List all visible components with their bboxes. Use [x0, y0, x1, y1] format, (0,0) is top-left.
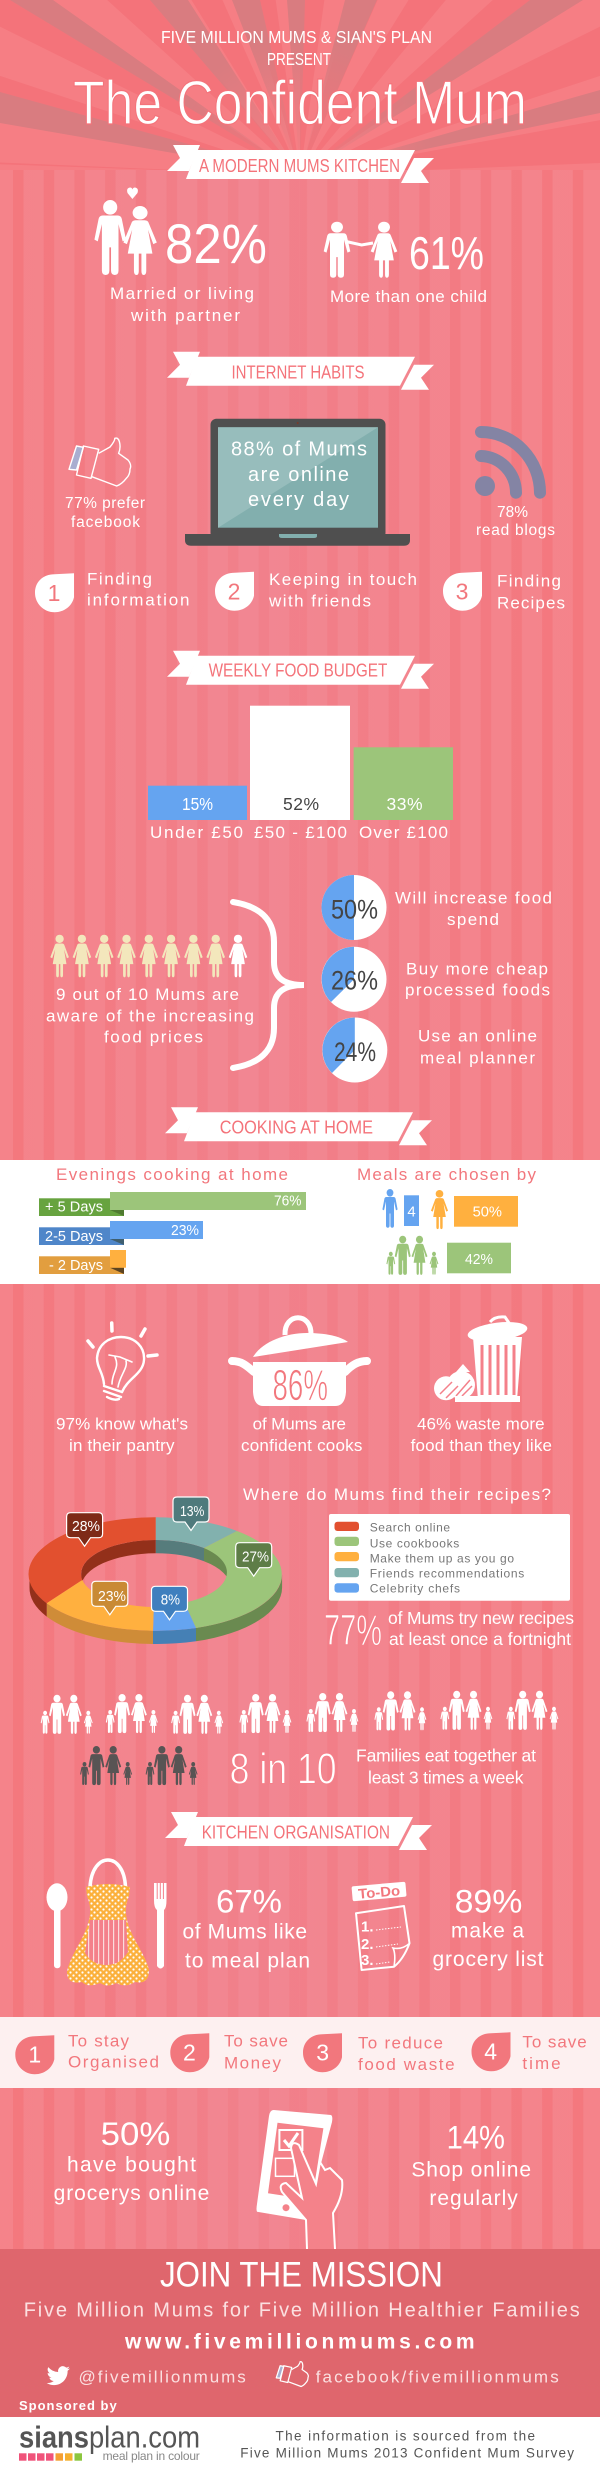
- source note: Five Million Mums 2013 Confident Mum Survey: [240, 2445, 574, 2460]
- pictogram: 9 out of 10 mums: aware of the increasing: [46, 1007, 254, 1026]
- stat: 14% shop online: 14%: [447, 2119, 505, 2155]
- logo: siansplan.com: siansplan.com: [19, 2420, 200, 2455]
- donut chart: recipe sources: [29, 1497, 282, 1644]
- icon: to-do list: 3.: [361, 1952, 374, 1969]
- panel: join the mission footer: [0, 2249, 600, 2417]
- pie: 26% cheap processed foods: Buy more cheap: [406, 959, 548, 978]
- panel: cooking at home: [0, 1160, 600, 1284]
- legend: recipe sources: Celebrity chefs: [370, 1581, 460, 1595]
- pictogram: 8 in 10 families: [41, 1691, 558, 1793]
- chart: evenings cooking at home: - 2 Days: [49, 1258, 103, 1274]
- logo: siansplan.com: meal plan in colour: [103, 2449, 200, 2463]
- panel: reasons for planning: Money: [224, 2053, 282, 2072]
- ranked list: internet uses: 2: [228, 578, 240, 604]
- stat: facebook thumb: facebook: [71, 514, 140, 531]
- ranked list: internet uses: 3: [456, 578, 468, 604]
- panel: reasons for planning: [0, 2017, 600, 2088]
- section banner: internet habits: INTERNET HABITS: [232, 362, 364, 382]
- icon: to-do list: To-Do: [357, 1882, 401, 1902]
- legend: recipe sources: Friends recommendations: [370, 1566, 524, 1580]
- stat: 77% try new recipes: [324, 1606, 574, 1655]
- ranked list: internet uses: Recipes: [497, 593, 565, 612]
- section banner: cooking at home: [165, 1107, 432, 1145]
- pie: 26% cheap processed foods: 26%: [331, 965, 378, 995]
- chart: evenings cooking at home: 76%: [274, 1194, 302, 1210]
- donut sides: [29, 1540, 282, 1644]
- stat: blogs rss icon: 78%: [497, 504, 528, 521]
- stat: 89% grocery list: grocery list: [432, 1948, 544, 1971]
- chart: meals are chosen by: [357, 1165, 536, 1275]
- bar chart: weekly food budget: 52%: [283, 794, 319, 814]
- stat: married or living with partner: with partner: [130, 306, 240, 325]
- stat: more than one child: More than one child: [330, 287, 487, 306]
- panel: sponsor and source: [0, 2417, 600, 2475]
- callout: 28%: [67, 1513, 103, 1546]
- pictogram: 8 in 10 families: least 3 times a week: [368, 1767, 524, 1787]
- panel: reasons for planning: 1: [28, 2042, 41, 2068]
- background: sunburst header: [0, 0, 600, 175]
- pie: 26% cheap processed foods: [322, 947, 550, 1012]
- stat: pantry lightbulb: 97% know what's: [56, 1414, 188, 1433]
- section banner: weekly food budget: [167, 651, 434, 689]
- panel: reasons for planning: time: [522, 2054, 561, 2073]
- stat: 89% grocery list: [432, 1883, 544, 1971]
- icon: phone and hand: [256, 2110, 342, 2249]
- stat: 67% meal plan: [182, 1883, 310, 1972]
- laptop: 88% of mums online: are online: [248, 464, 349, 486]
- pictogram: 8 in 10 families: 8 in 10: [230, 1744, 337, 1793]
- stat: 67% meal plan: 67%: [216, 1883, 282, 1919]
- ranked list: internet uses: [35, 569, 565, 612]
- callout: 27%: 27%: [242, 1548, 269, 1565]
- stat: pantry lightbulb: [56, 1323, 188, 1455]
- pictogram: 8 in 10 families: Families eat together at: [356, 1746, 536, 1766]
- section banner: cooking at home: COOKING AT HOME: [220, 1117, 373, 1137]
- pictogram: 9 out of 10 mums: [46, 935, 254, 1047]
- pie: 26% cheap processed foods: processed foods: [405, 981, 550, 1000]
- laptop: 88% of mums online: 88% of Mums: [231, 439, 367, 461]
- icon: to-do list: [351, 1882, 410, 1970]
- stat: pantry lightbulb: in their pantry: [69, 1436, 175, 1455]
- stat: married or living with partner: [94, 188, 267, 325]
- source note: [240, 2429, 574, 2460]
- callout: 23%: [92, 1581, 128, 1615]
- panel: reasons for planning: food waste: [358, 2055, 455, 2074]
- ranked list: internet uses: Finding: [87, 569, 152, 588]
- callout: 13%: [173, 1497, 209, 1530]
- pictogram: 9 out of 10 mums: food prices: [104, 1028, 203, 1047]
- stat: blogs rss icon: read blogs: [476, 522, 555, 539]
- pie: 50% increase food spend: Will increase food: [395, 888, 552, 907]
- donut top face: [29, 1517, 282, 1631]
- chart: meals are chosen by: 4: [407, 1204, 416, 1221]
- section banner: weekly food budget: WEEKLY FOOD BUDGET: [209, 661, 387, 681]
- stat: food waste bin: 46% waste more: [417, 1414, 545, 1433]
- panel: reasons for planning: To reduce: [358, 2033, 443, 2052]
- title block: PRESENT: [267, 49, 331, 69]
- bar chart: weekly food budget: 33%: [386, 794, 422, 814]
- bar chart: weekly food budget: Over £100: [359, 823, 448, 842]
- pie: 24% online meal planner: 24%: [334, 1037, 376, 1067]
- stat: confident cooks pot: [232, 1318, 367, 1455]
- section banner: internet habits: [167, 352, 434, 390]
- pictogram: 9 out of 10 mums: 9 out of 10 Mums are: [56, 985, 239, 1004]
- stat: married or living with partner: 82%: [165, 212, 267, 275]
- stat: 67% meal plan: to meal plan: [185, 1949, 310, 1972]
- laptop: 88% of mums online: [185, 419, 410, 546]
- stat: confident cooks pot: of Mums are: [253, 1414, 346, 1433]
- stat: food waste bin: [411, 1317, 552, 1455]
- title block: FIVE MILLION MUMS & SIAN'S PLAN: [161, 27, 432, 47]
- stat: 77% try new recipes: at least once a fortnight: [389, 1629, 571, 1649]
- stat: more than one child: 61%: [409, 227, 484, 279]
- chart: evenings cooking at home: + 5 Days: [45, 1200, 103, 1216]
- pie: 24% online meal planner: Use an online: [418, 1027, 537, 1046]
- stat: confident cooks pot: confident cooks: [241, 1436, 362, 1455]
- chart: meals are chosen by: 50%: [473, 1205, 502, 1221]
- icon: facebook thumb: [276, 2362, 308, 2387]
- panel: reasons for planning: 4: [484, 2038, 497, 2064]
- legend: recipe sources: Make them up as you go: [370, 1552, 514, 1566]
- heading: where do mums find their recipes: Where do Mums find their recipes?: [243, 1485, 551, 1504]
- icon: apron, spoon and fork: [46, 1860, 166, 1986]
- bar chart: weekly food budget: [148, 706, 453, 842]
- legend: recipe sources: [329, 1514, 570, 1601]
- pie: 50% increase food spend: [322, 875, 552, 940]
- callout: 8%: [152, 1586, 188, 1620]
- icon: to-do list: 2.: [361, 1936, 374, 1953]
- source note: The information is sourced from the: [276, 2429, 535, 2444]
- panel: join the mission footer: Sponsored by: [19, 2398, 117, 2413]
- legend: recipe sources: Use cookbooks: [370, 1536, 459, 1550]
- stat: more than one child: [324, 222, 487, 306]
- section banner: kitchen organisation: [165, 1812, 432, 1850]
- ranked list: internet uses: with friends: [268, 591, 371, 610]
- icon: to-do list: 1.: [361, 1919, 374, 1936]
- panel: reasons for planning: Organised: [68, 2053, 159, 2072]
- bar chart: weekly food budget: 15%: [182, 794, 213, 814]
- legend: recipe sources: Search online: [370, 1521, 450, 1535]
- panel: reasons for planning: 3: [316, 2040, 329, 2066]
- callout: 8%: 8%: [161, 1592, 180, 1609]
- pie: 50% increase food spend: 50%: [331, 894, 378, 924]
- panel: join the mission footer: JOIN THE MISSION: [160, 2256, 443, 2295]
- section banner: a modern mums kitchen: [167, 145, 434, 183]
- stat: 14% shop online: regularly: [429, 2187, 518, 2210]
- callout: 13%: 13%: [180, 1503, 204, 1520]
- stat: 14% shop online: [411, 2119, 531, 2210]
- chart: evenings cooking at home: [39, 1165, 306, 1274]
- stat: 14% shop online: Shop online: [411, 2159, 531, 2182]
- laptop: 88% of mums online: every day: [248, 489, 349, 511]
- bar chart: weekly food budget: Under £50: [150, 823, 243, 842]
- chart: meals are chosen by: Meals are chosen by: [357, 1165, 536, 1184]
- stat: married or living with partner: Married or living: [110, 284, 254, 303]
- panel: join the mission footer: facebook/fivemillionmums: [316, 2367, 559, 2386]
- stat: 77% try new recipes: 77%: [324, 1606, 382, 1655]
- stat: 50% bought groceries online: 50%: [101, 2116, 170, 2152]
- stat: 89% grocery list: make a: [451, 1919, 524, 1942]
- pie: 50% increase food spend: spend: [447, 910, 499, 929]
- stat: facebook thumb: [65, 438, 145, 531]
- stat: food waste bin: food than they like: [411, 1436, 552, 1455]
- stat: 89% grocery list: 89%: [455, 1883, 522, 1919]
- bar chart: weekly food budget: £50 - £100: [254, 823, 347, 842]
- panel: reasons for planning: To save: [522, 2033, 587, 2052]
- stat: 50% bought groceries online: have bought: [67, 2154, 196, 2177]
- chart: meals are chosen by: 42%: [465, 1252, 493, 1268]
- stat: 50% bought groceries online: [54, 2116, 209, 2205]
- ranked list: internet uses: Finding: [497, 572, 561, 591]
- chart: evenings cooking at home: 23%: [171, 1223, 199, 1239]
- ranked list: internet uses: Keeping in touch: [269, 570, 417, 589]
- stat: confident cooks pot: 86%: [272, 1361, 328, 1410]
- callout: 23%: 23%: [98, 1588, 126, 1605]
- panel: join the mission footer: @fivemillionmums: [78, 2367, 246, 2386]
- chart: evenings cooking at home: 2-5 Days: [45, 1229, 103, 1245]
- section banner: a modern mums kitchen: A MODERN MUMS KITCHEN: [199, 156, 400, 176]
- pie: 24% online meal planner: [322, 1018, 537, 1082]
- panel: join the mission footer: www.fivemillionmums.com: [124, 2330, 474, 2353]
- panel: reasons for planning: To save: [224, 2032, 288, 2051]
- section banner: kitchen organisation: KITCHEN ORGANISATION: [202, 1822, 390, 1842]
- stat: blogs rss icon: [475, 432, 555, 539]
- callout: 28%: 28%: [72, 1518, 100, 1535]
- stat: 50% bought groceries online: grocerys online: [54, 2182, 209, 2205]
- icon: twitter bird: [47, 2366, 70, 2385]
- stat: facebook thumb: 77% prefer: [65, 495, 145, 512]
- stat: 67% meal plan: of Mums like: [182, 1920, 307, 1943]
- chart: evenings cooking at home: Evenings cooking at home: [56, 1165, 288, 1184]
- ranked list: internet uses: 1: [48, 580, 60, 606]
- callout: 27%: [236, 1543, 272, 1576]
- ranked list: internet uses: information: [87, 591, 190, 610]
- pie: 24% online meal planner: meal planner: [420, 1048, 535, 1067]
- panel: join the mission footer: Five Million Mums for Five Million Healthier Families: [24, 2300, 580, 2322]
- title block: [73, 27, 527, 138]
- panel: reasons for planning: To stay: [68, 2032, 130, 2051]
- brace: [233, 902, 304, 1068]
- stat: 77% try new recipes: of Mums try new recipes: [388, 1608, 574, 1628]
- panel: reasons for planning: 2: [183, 2040, 196, 2066]
